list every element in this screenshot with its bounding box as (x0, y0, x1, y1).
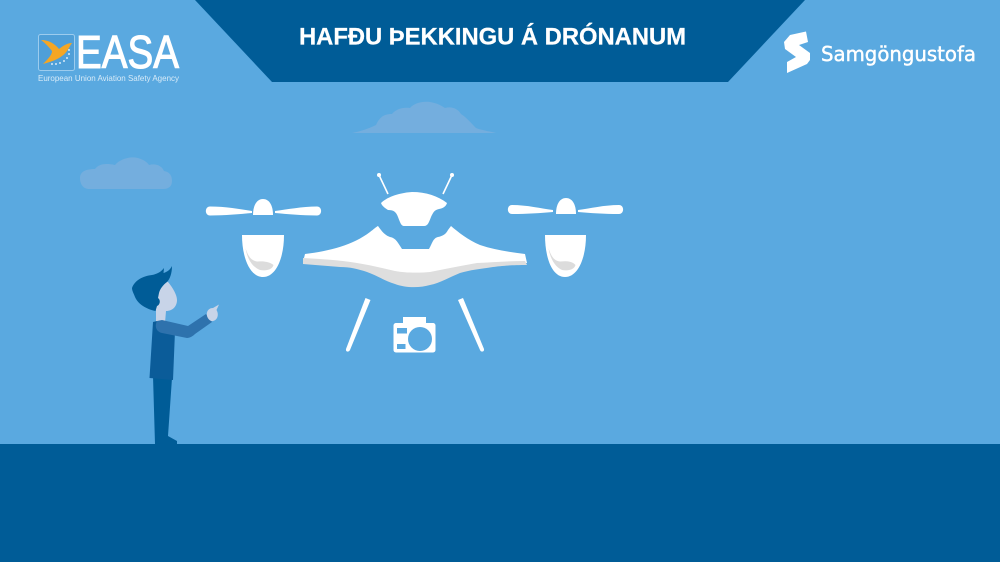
title banner (195, 0, 805, 82)
ground (0, 444, 1000, 562)
title banner: HAFÐU ÞEKKINGU Á DRÓNANUM (299, 22, 686, 50)
drone head (381, 192, 447, 226)
Samgöngustofa logo (784, 32, 976, 73)
arm (156, 314, 212, 338)
right motor (545, 235, 586, 277)
icon: EASA bird square (38, 34, 74, 70)
legs (153, 376, 177, 444)
right propeller (508, 198, 623, 214)
cloud: small (80, 157, 172, 189)
hand (207, 304, 219, 321)
left leg (346, 298, 370, 352)
neck and face (156, 281, 177, 323)
antennas (377, 173, 454, 194)
right leg (458, 298, 484, 352)
left propeller (206, 199, 321, 216)
torso (150, 321, 175, 380)
drone body (303, 226, 527, 287)
icon: camera (394, 317, 436, 352)
cloud: large (352, 102, 496, 133)
icon: Samgöngustofa S mark (784, 32, 810, 73)
Samgöngustofa logo: Samgöngustofa (821, 42, 976, 66)
EASA logo: EASA (76, 26, 179, 78)
drone (206, 173, 623, 352)
EASA logo (38, 26, 180, 83)
hair (132, 266, 172, 311)
person (132, 266, 219, 444)
EASA logo: European Union Aviation Safety Agency (38, 73, 180, 83)
left motor (242, 235, 284, 277)
